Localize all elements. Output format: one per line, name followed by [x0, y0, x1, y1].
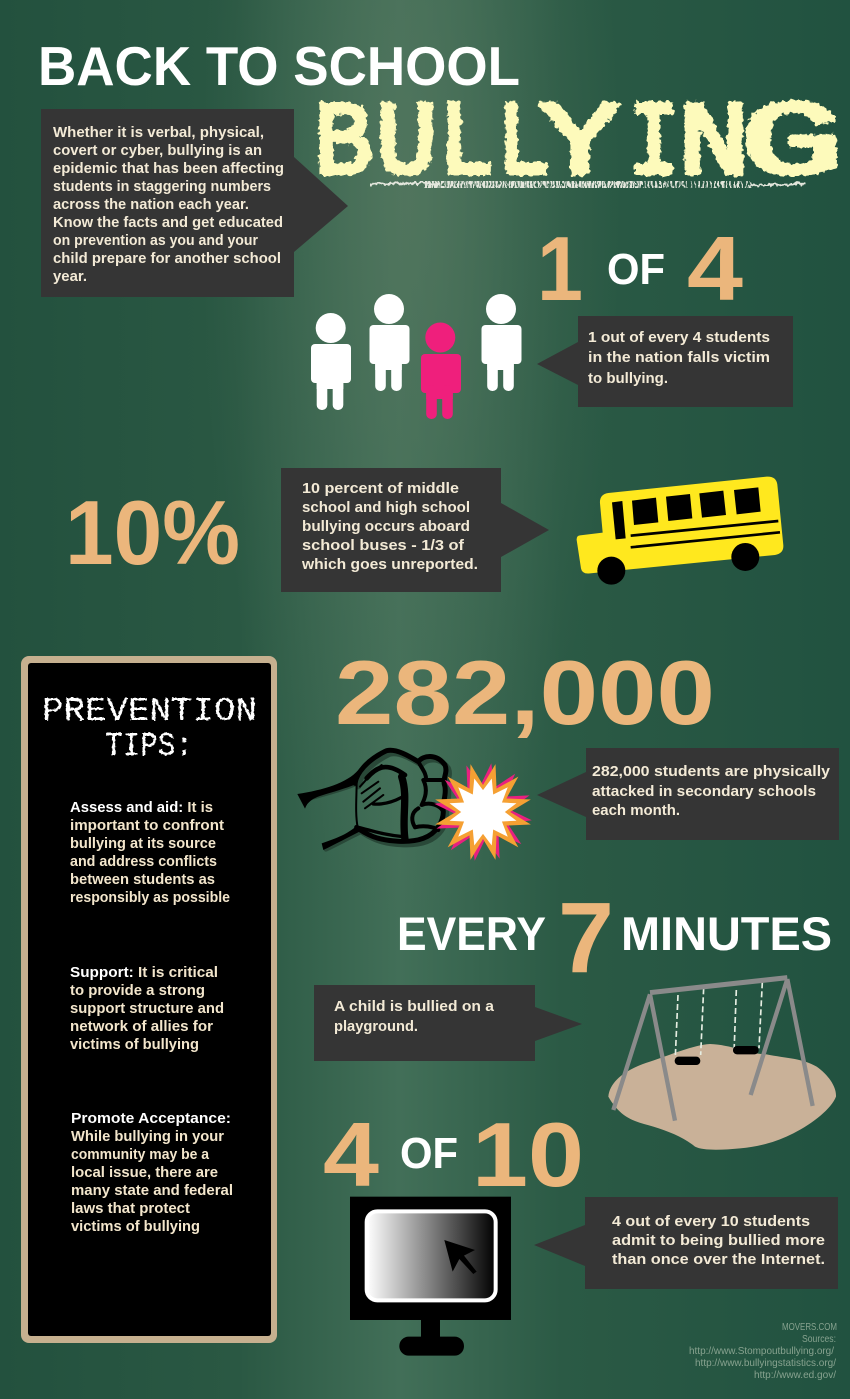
tip: support: support structure and [70, 1001, 224, 1017]
callout: introduction: child prepare for another school [53, 251, 281, 267]
stat: 1 of 4: OF [607, 245, 665, 294]
tip: support [70, 965, 224, 1053]
stat: every 7 minutes: MINUTES [621, 907, 832, 960]
tip: promote acceptance: While bullying in your [71, 1129, 224, 1145]
tip: assess and aid: bullying at its source [70, 836, 216, 852]
callout: introduction: year. [53, 269, 87, 285]
callout: physical attacks [537, 748, 839, 840]
tip: support: victims of bullying [70, 1037, 199, 1053]
title: chalk bullying: B [314, 86, 373, 205]
callout: school buses: school and high school [302, 500, 470, 516]
stat: every 7 minutes: EVERY [397, 907, 546, 960]
tip: assess and aid: between students as [70, 872, 215, 888]
icon: impact burst [431, 760, 535, 864]
icon: swing set on sand [608, 978, 836, 1150]
callout: physical attacks: each month. [592, 803, 680, 819]
tip: promote acceptance: laws that protect [71, 1201, 190, 1217]
student 1 [311, 313, 351, 410]
student 3: victim [421, 322, 461, 419]
tip: promote acceptance: victims of bullying [71, 1219, 200, 1235]
tip: promote acceptance: community may be a [71, 1147, 210, 1163]
callout: school buses: bullying occurs aboard [302, 519, 470, 535]
student 2 [370, 294, 410, 391]
icon: school bus [577, 477, 783, 585]
stat: 1 of 4: 4 [687, 219, 743, 320]
tip: support: Support: It is critical [70, 965, 218, 981]
title: chalk bullying: Y [539, 86, 621, 205]
sources credit [689, 1321, 837, 1381]
tip: promote acceptance: Promote Acceptance: [71, 1111, 231, 1127]
callout: 1 of 4: in the nation falls victim [588, 350, 770, 366]
sources credit: http://www.ed.gov/ [754, 1369, 836, 1381]
callout: introduction: Know the facts and get educated [53, 215, 283, 231]
tip: assess and aid: and address conflicts [70, 854, 217, 870]
stat: every 7 minutes: 7 [558, 882, 614, 994]
callout: school buses: 10 percent of middle [302, 481, 459, 497]
title: chalk bullying: N [678, 86, 750, 205]
callout: introduction: students in staggering numbers [53, 179, 271, 195]
tip: assess and aid: Assess and aid: It is [70, 800, 213, 816]
callout: 1 of 4: to bullying. [588, 371, 668, 387]
callout: introduction: epidemic that has been affecting [53, 161, 284, 177]
callout: school buses [281, 468, 549, 592]
tip: assess and aid: responsibly as possible [70, 890, 230, 906]
title: back to school: BACK TO SCHOOL [38, 35, 520, 97]
panel: prevention tips blackboard [21, 656, 277, 1343]
stat: 4 of 10: 10 [472, 1105, 584, 1206]
tip: promote acceptance [71, 1111, 233, 1235]
fist lines [355, 750, 446, 841]
title: chalk bullying: I [628, 86, 680, 205]
title: chalk bullying: G [740, 86, 843, 205]
sources credit: http://www.bullyingstatistics.org/ [695, 1357, 836, 1369]
tip: promote acceptance: many state and federal [71, 1183, 233, 1199]
callout: internet bullying: 4 out of every 10 students [612, 1214, 810, 1230]
stat: 1 of 4: 1 [537, 219, 583, 320]
callout: introduction: across the nation each year. [53, 197, 249, 213]
tip: promote acceptance: local issue, there are [71, 1165, 218, 1181]
title: chalk bullying [314, 86, 843, 205]
chalk underline scribble [370, 183, 805, 186]
callout: school buses: school buses - 1/3 of [302, 538, 464, 554]
stat: 4 of 10 [323, 1105, 584, 1206]
tip: support: to provide a strong [70, 983, 205, 999]
callout: physical attacks: attacked in secondary schools [592, 784, 816, 800]
title: chalk bullying: L [497, 86, 551, 205]
callout: internet bullying [534, 1197, 838, 1289]
student 4 [482, 294, 522, 391]
tip: assess and aid: important to confront [70, 818, 224, 834]
callout: 1 of 4 [537, 316, 793, 407]
callout: physical attacks: 282,000 students are physically [592, 764, 830, 780]
stat: 4 of 10: OF [400, 1129, 458, 1178]
callout: introduction: Whether it is verbal, physical, [53, 125, 264, 141]
callout: playground: A child is bullied on a [334, 999, 495, 1015]
title: chalk bullying: U [376, 86, 437, 205]
icon: fist [297, 750, 449, 850]
heading: prevention tips [42, 693, 257, 765]
stat: 4 of 10: 4 [323, 1105, 379, 1206]
callout: playground: playground. [334, 1019, 418, 1035]
heading: prevention tips: TIPS: [105, 728, 193, 765]
stat: 1 of 4 [537, 219, 743, 320]
callout: internet bullying: admit to being bullied more [612, 1233, 825, 1249]
fist shadow [303, 754, 449, 849]
stat: 282,000: 282,000 [335, 643, 715, 744]
callout: school buses: which goes unreported. [301, 557, 478, 573]
callout: introduction [41, 109, 348, 297]
callout: introduction: covert or cyber, bullying is an [53, 143, 262, 159]
sources credit: Sources: [802, 1333, 836, 1345]
heading: prevention tips: PREVENTION [42, 693, 257, 730]
callout: introduction: on prevention as you and your [53, 233, 258, 249]
callout: playground [314, 985, 582, 1061]
tip: support: network of allies for [70, 1019, 213, 1035]
sources credit: http://www.Stompoutbullying.org/ [689, 1345, 834, 1357]
stat: every 7 minutes [397, 882, 832, 994]
icon: four students, one highlighted [311, 294, 522, 419]
icon: computer monitor with cursor [350, 1197, 511, 1356]
stat: 10%: 10% [65, 483, 240, 584]
tip: assess and aid [70, 800, 230, 906]
title: chalk bullying: L [439, 86, 495, 205]
callout: 1 of 4: 1 out of every 4 students [588, 330, 770, 346]
callout: internet bullying: than once over the Internet. [612, 1252, 825, 1268]
